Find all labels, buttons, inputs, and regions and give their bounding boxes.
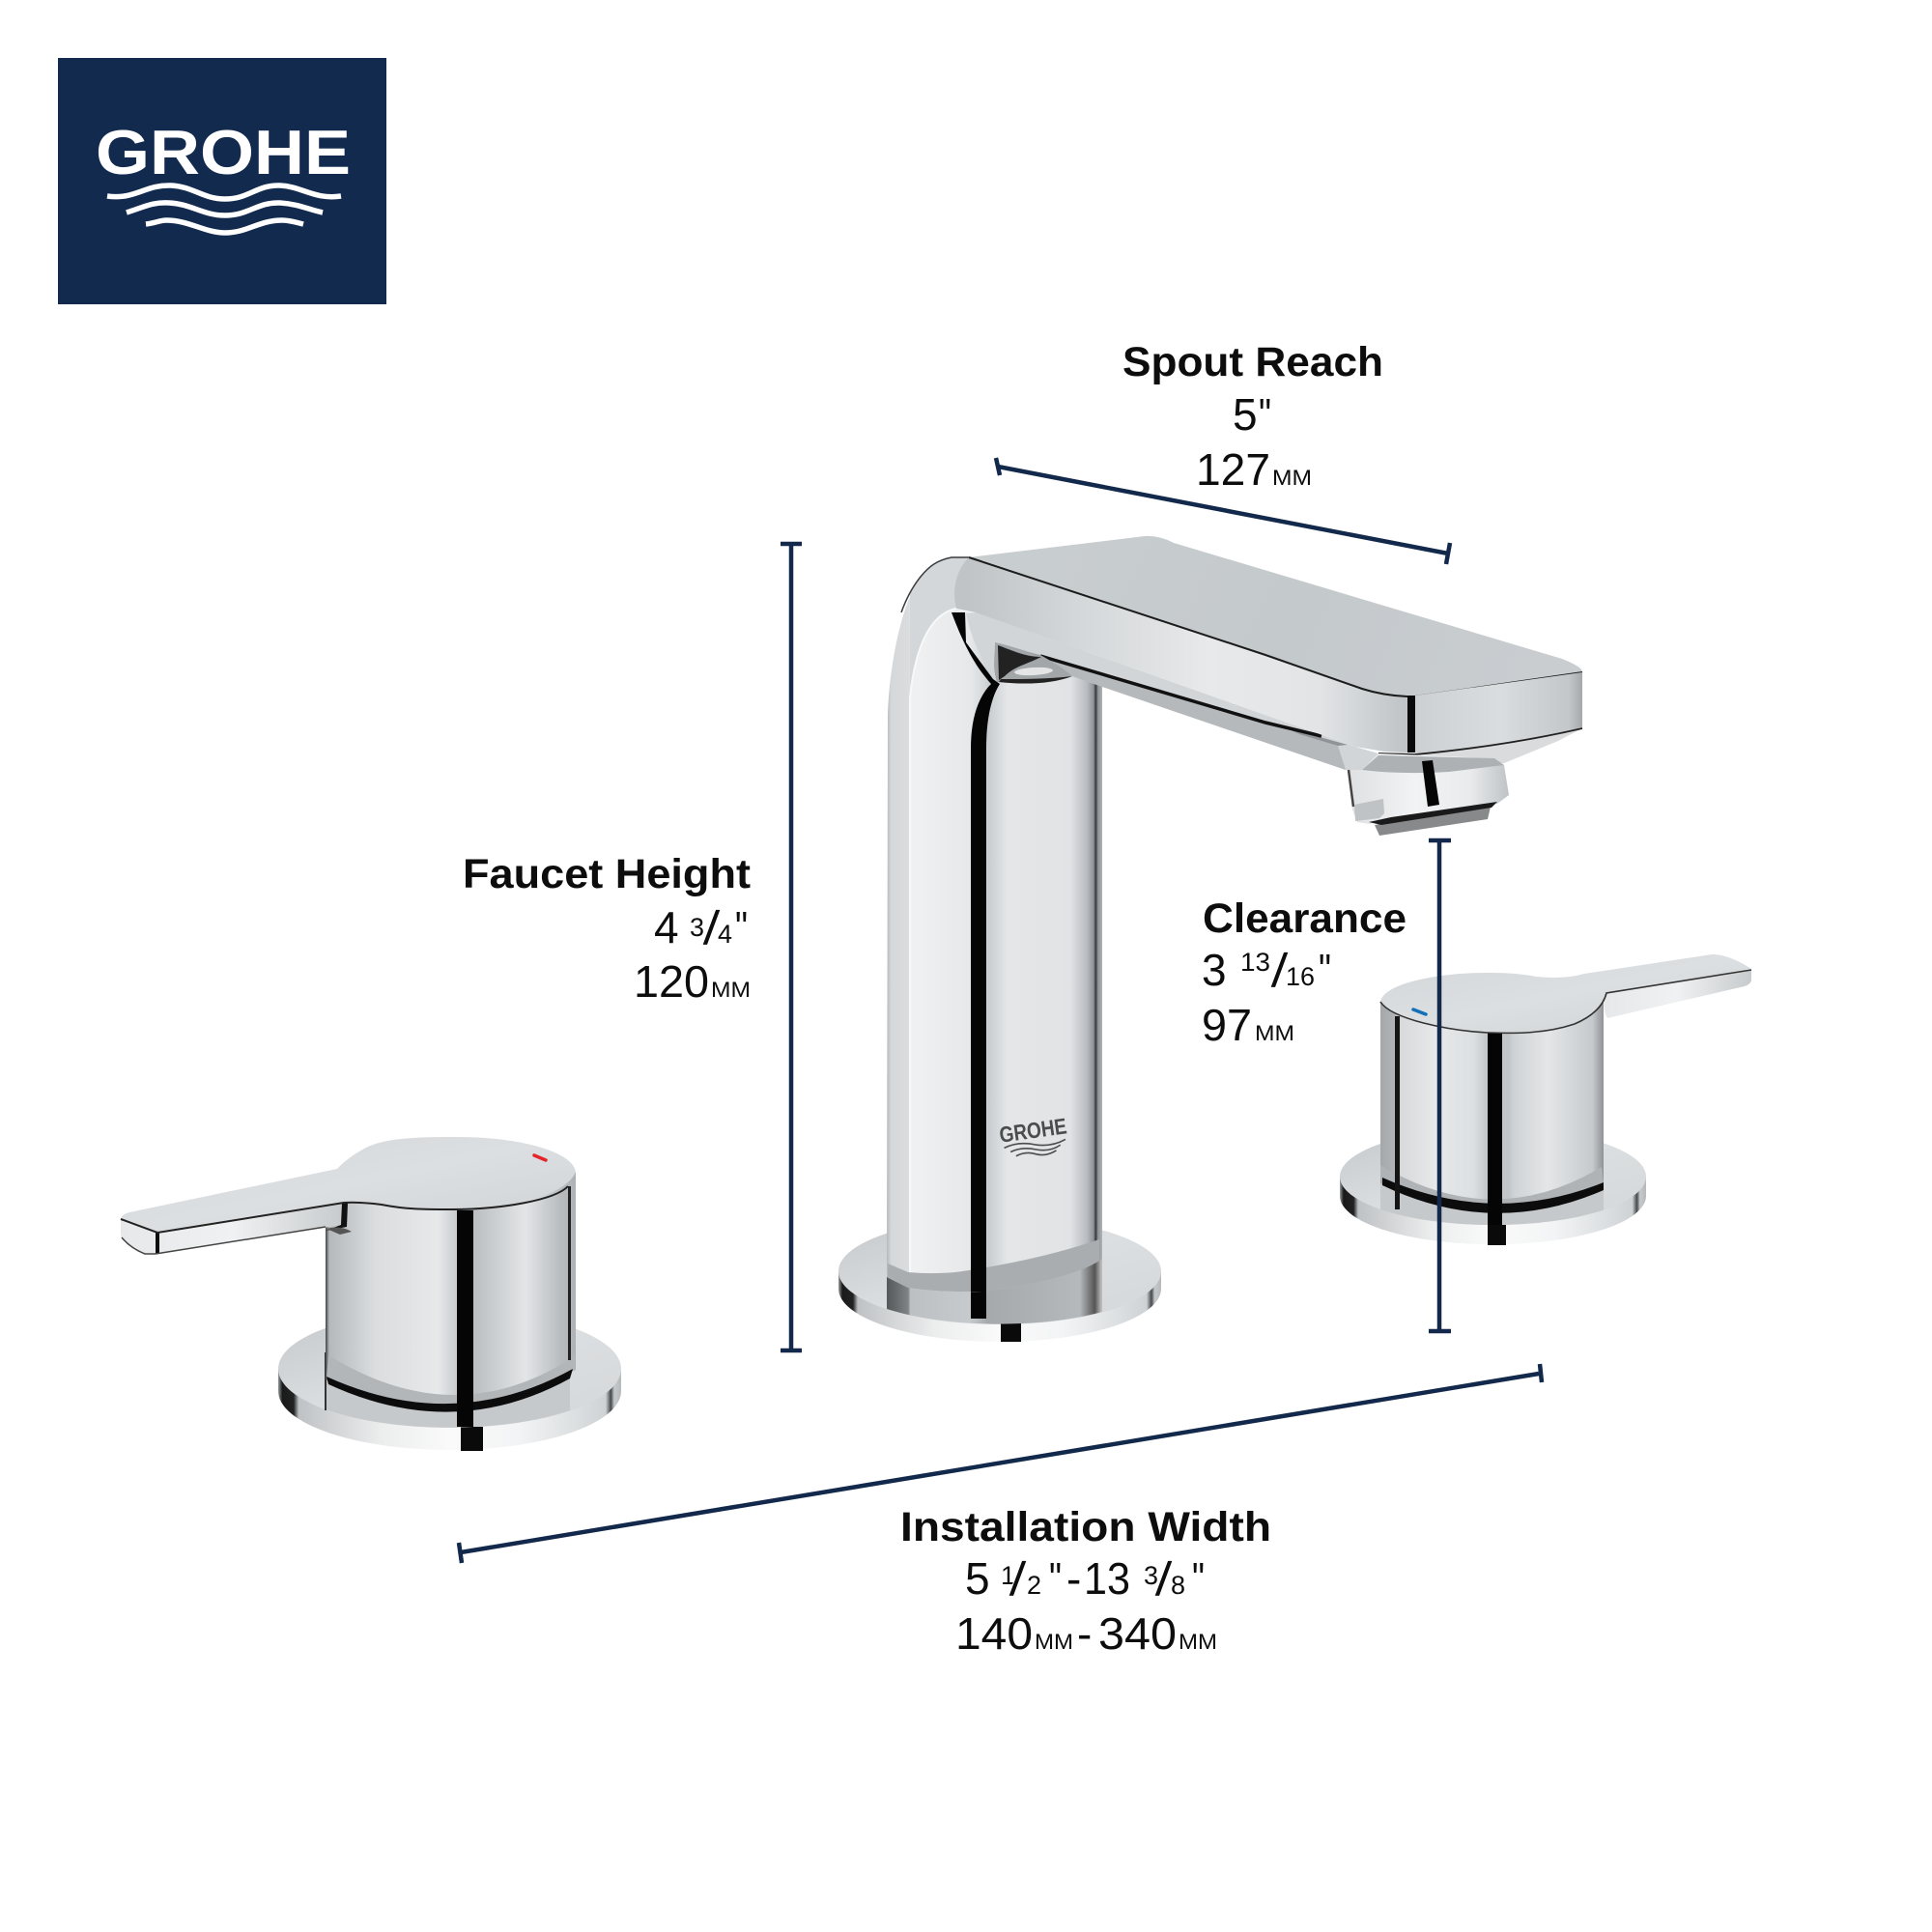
label: Installation Width: 340 <box>1098 1608 1177 1659</box>
spout junction reflection <box>994 642 1072 684</box>
spout end face <box>1415 672 1582 753</box>
arrow: clearance dimension line <box>1429 840 1451 1331</box>
logo: GROHE brand block <box>58 58 386 304</box>
faucet base disc <box>838 1218 1161 1342</box>
label: Installation Width: " <box>1192 1553 1205 1604</box>
icon: red hot marker <box>534 1155 546 1160</box>
label: Clearance: 97 <box>1202 1000 1252 1050</box>
label: Installation Width: 3 <box>1144 1561 1158 1590</box>
label: Clearance: 16 <box>1286 962 1315 991</box>
label: Installation Width: 2 <box>1027 1571 1041 1600</box>
label: Installation Width: - <box>1077 1608 1092 1659</box>
label: Installation Width: / <box>1009 1552 1027 1606</box>
label: Faucet Height: 4 <box>718 920 732 949</box>
label: Installation Width: 13 <box>1084 1553 1130 1604</box>
label: Clearance <box>1202 895 1406 1050</box>
right handle cylinder <box>1380 1003 1604 1211</box>
label: Installation Width: MM <box>1179 1630 1217 1654</box>
label: Faucet Height: 3 <box>690 913 704 942</box>
faucet column and body <box>887 557 1102 1292</box>
logo: small GROHE mark on column <box>998 1113 1070 1160</box>
column dark reflection stripe <box>952 612 1000 1292</box>
logo: GROHE brand block: GROHE <box>96 117 351 187</box>
icon: blue cold marker <box>1413 1009 1426 1014</box>
label: Installation Width: " <box>1049 1553 1062 1604</box>
right handle top <box>1380 954 1751 1033</box>
arrow: installation width dimension line <box>459 1364 1542 1563</box>
label: Faucet Height: Faucet Height <box>463 851 751 897</box>
label: Clearance: MM <box>1255 1021 1294 1045</box>
arrow: spout reach dimension line <box>996 458 1450 564</box>
illustration: left hot handle <box>121 1137 621 1451</box>
label: Faucet Height: " <box>735 902 748 952</box>
spout underside recess <box>966 612 1378 770</box>
right handle lever arm <box>1604 970 1751 1018</box>
label: Faucet Height: 4 <box>654 902 679 952</box>
label: Faucet Height: 120 <box>634 956 709 1007</box>
label: Spout Reach <box>1122 339 1383 495</box>
label: Clearance: 3 <box>1202 945 1227 995</box>
aerator <box>1348 753 1509 836</box>
left handle base disc <box>278 1369 621 1450</box>
label: Installation Width: / <box>1154 1552 1173 1606</box>
label: Spout Reach: MM <box>1272 466 1312 490</box>
label: Installation Width <box>900 1504 1271 1659</box>
left handle top <box>121 1137 576 1233</box>
left handle cylinder <box>326 1173 576 1407</box>
label: Spout Reach: 5 <box>1233 389 1258 440</box>
label: Installation Width: - <box>1066 1553 1081 1604</box>
label: Installation Width: Installation Width <box>900 1504 1271 1550</box>
label: Clearance: 13 <box>1240 948 1270 977</box>
label: Spout Reach: " <box>1259 389 1271 440</box>
label: Spout Reach: Spout Reach <box>1122 339 1383 385</box>
label: Faucet Height: / <box>702 901 721 955</box>
label: Installation Width: 5 <box>965 1553 990 1604</box>
label: Clearance: / <box>1270 944 1289 998</box>
label: Installation Width: 140 <box>955 1608 1033 1659</box>
spout front face <box>954 557 1407 753</box>
left handle lever arm <box>121 1203 344 1254</box>
label: Clearance: " <box>1319 945 1331 995</box>
label: Installation Width: MM <box>1035 1630 1073 1654</box>
illustration: main faucet <box>838 536 1582 1342</box>
logo: small GROHE mark on column: GROHE <box>998 1113 1068 1148</box>
label: Installation Width: 8 <box>1171 1571 1185 1600</box>
label: Installation Width: 1 <box>1001 1561 1015 1590</box>
right handle base disc <box>1340 1177 1646 1244</box>
label: Faucet Height: MM <box>711 978 751 1002</box>
label: Clearance: Clearance <box>1203 895 1406 942</box>
label: Spout Reach: 127 <box>1196 444 1270 495</box>
arrow: faucet height dimension line <box>781 544 802 1350</box>
spout top surface <box>969 536 1582 696</box>
label: Faucet Height <box>463 851 751 1007</box>
illustration: right cold handle <box>1340 954 1751 1245</box>
